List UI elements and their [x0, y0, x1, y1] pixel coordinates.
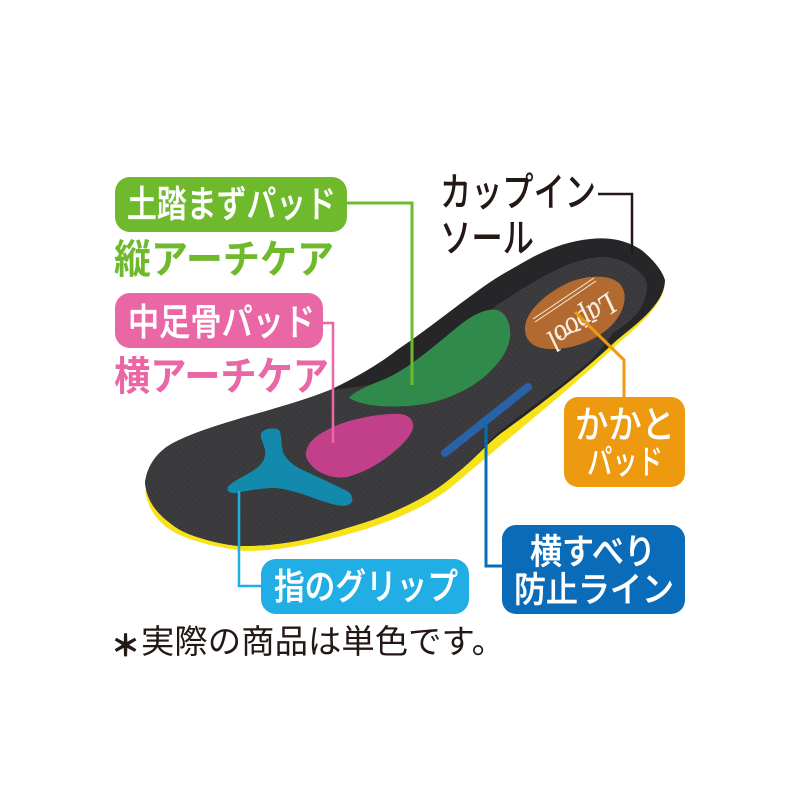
text: longitudinal arch care: 縦アーチケア [114, 238, 334, 282]
label: heel pad [564, 397, 685, 487]
black leader line [598, 194, 632, 254]
label: toe grip: 指のグリップ [274, 566, 458, 607]
label: metatarsal pad: 中足骨パッド [128, 302, 315, 343]
green leader line [347, 203, 412, 385]
blue toe grip [227, 428, 352, 506]
text: cup insole [440, 171, 596, 261]
heel pad [525, 277, 625, 358]
pink leader line [323, 323, 333, 443]
label: heel pad: かかと [575, 405, 675, 447]
label: arch pad: 土踏まずパッド [127, 184, 336, 225]
insole woven footbed [145, 257, 647, 546]
green arch pad [349, 310, 510, 406]
label: anti-slip line: 横すべり [530, 533, 656, 572]
footnote: 実際の商品は単色です。 [141, 623, 505, 660]
insole [145, 238, 665, 551]
label: toe grip [261, 559, 469, 614]
yellow sole edge [145, 290, 664, 551]
label: heel pad: パッド [587, 444, 663, 482]
footnote: ＊ [111, 631, 140, 663]
heel pad logo: Lapool [541, 286, 624, 358]
label: anti-slip line: 防止ライン [514, 571, 674, 610]
insole outer body [145, 238, 665, 546]
text: transverse arch care: 横アーチケア [114, 355, 329, 399]
label: anti-slip line [502, 525, 685, 614]
orange leader line [575, 312, 624, 398]
label: arch pad [115, 177, 347, 232]
cyan leader line [239, 491, 262, 586]
blue anti-slip line [445, 387, 528, 453]
label: metatarsal pad [115, 293, 323, 348]
text: cup insole: カップイン [440, 171, 596, 215]
text: cup insole: ソール [440, 217, 534, 261]
blue leader line [486, 420, 502, 566]
pink metatarsal pad [306, 414, 413, 478]
